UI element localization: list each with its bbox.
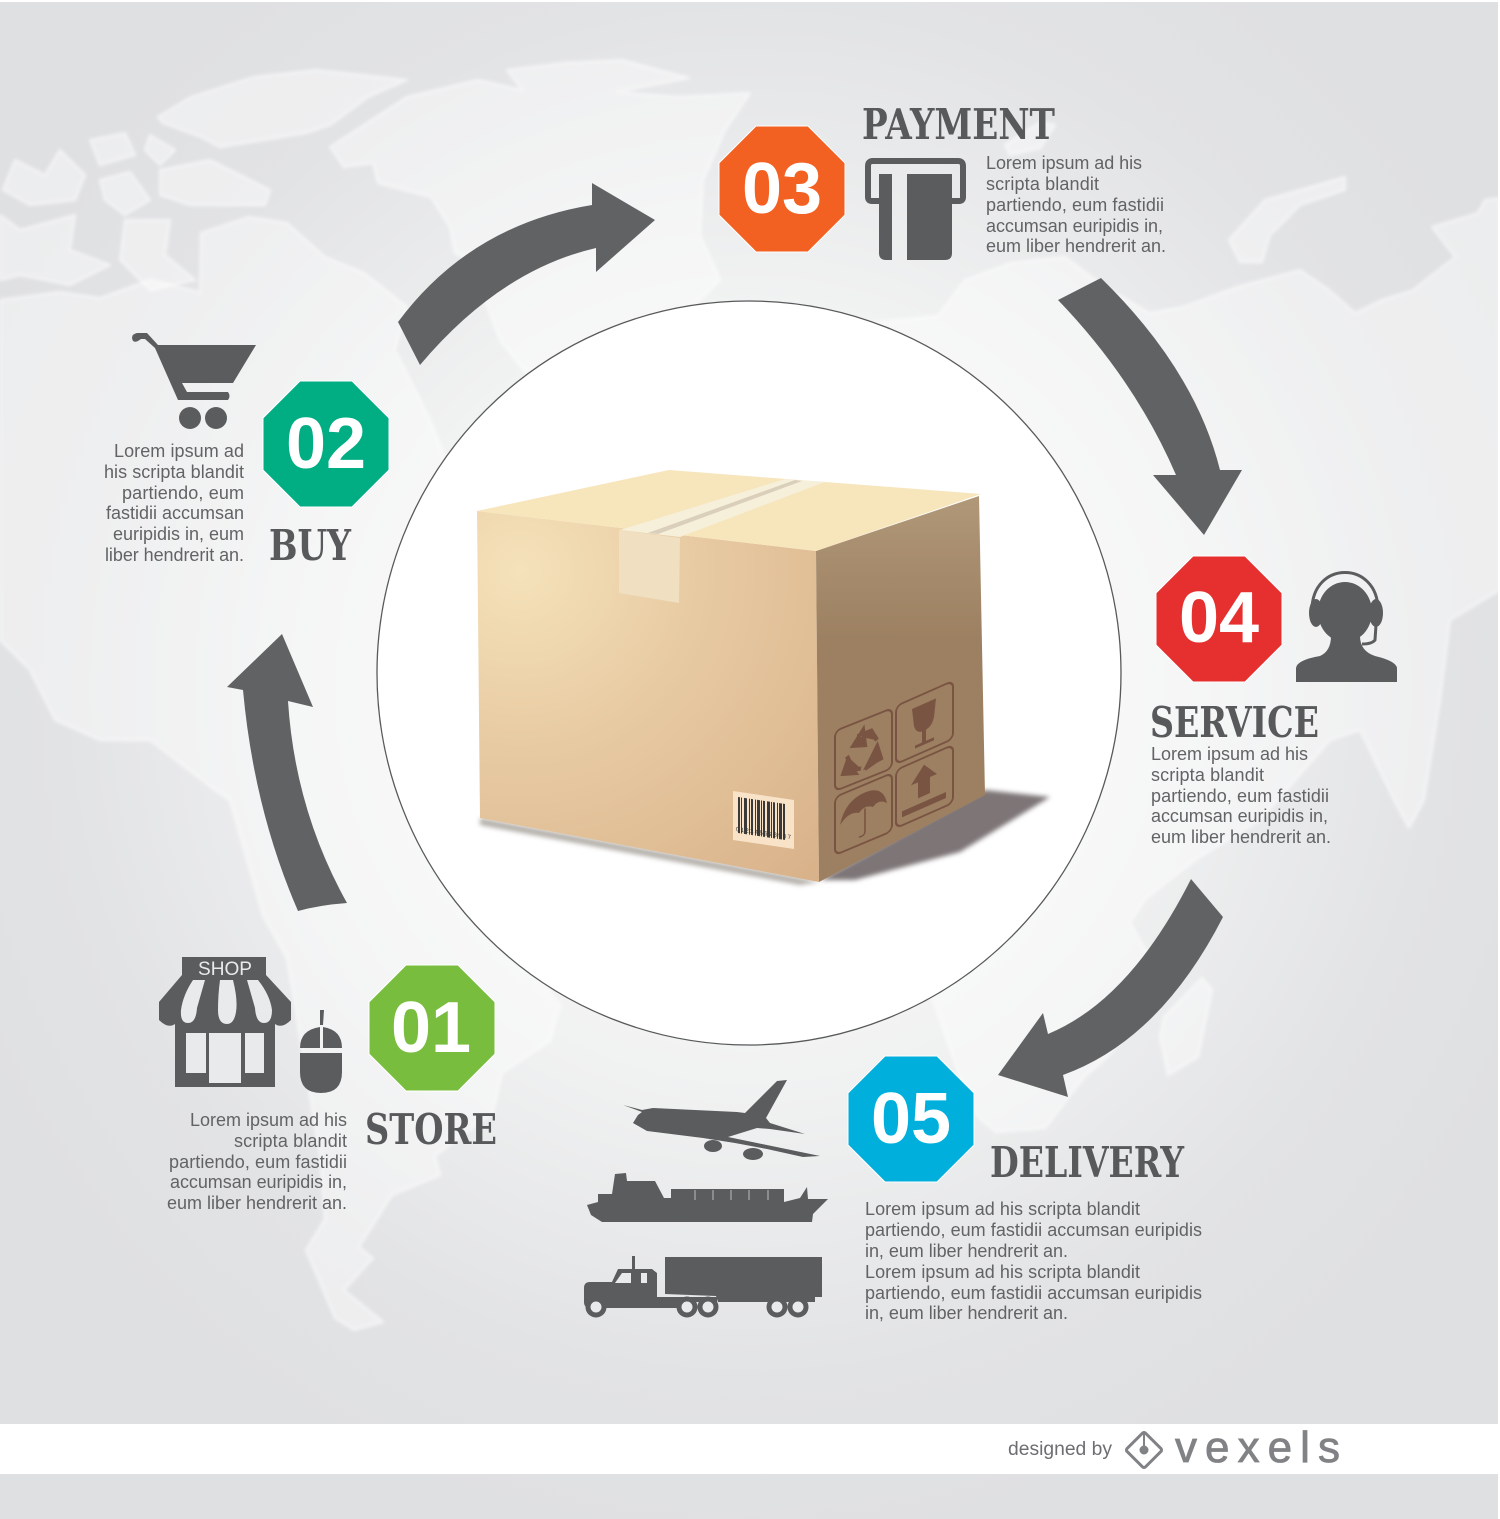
barcode label: [733, 791, 794, 849]
text: payment description: [986, 153, 1166, 256]
badge 05: [848, 1056, 974, 1182]
badge 03: 03: [742, 149, 822, 229]
text: delivery description: partiendo, eum fastidii accumsan euripidis: [865, 1220, 1202, 1240]
step 05 delivery: [584, 1056, 1202, 1323]
badge 01: 01: [391, 988, 471, 1068]
text: service description: partiendo, eum fastidii: [1151, 786, 1329, 806]
heading: delivery: DELIVERY: [990, 1138, 1185, 1187]
badge 04: 04: [1179, 578, 1259, 658]
text: payment description: scripta blandit: [986, 174, 1099, 194]
step 01 store: [159, 957, 497, 1213]
icon: shopping cart: [132, 333, 256, 429]
icon: truck: [584, 1256, 822, 1315]
text: buy description: partiendo, eum: [122, 483, 244, 503]
icon: container ship: [587, 1173, 828, 1222]
badge 01: [369, 965, 495, 1091]
text: buy description: his scripta blandit: [104, 462, 244, 482]
badge 04: [1156, 556, 1282, 682]
text: payment description: partiendo, eum fastidii: [986, 195, 1164, 215]
step 02 buy: [104, 333, 389, 570]
text: store description: [167, 1110, 347, 1213]
text: store description: Lorem ipsum ad his: [190, 1110, 347, 1130]
icon: computer mouse: [300, 1010, 342, 1093]
packing tape: [620, 479, 825, 537]
central white circle: [377, 301, 1121, 1045]
footer band: [0, 1423, 1500, 1474]
box side face: [816, 496, 985, 882]
heading: service: SERVICE: [1150, 698, 1319, 747]
arrow: store to buy: [227, 634, 347, 911]
icon: shop: SHOP: [198, 959, 252, 980]
text: payment description: accumsan euripidis in,: [986, 216, 1163, 236]
text: delivery description: Lorem ipsum ad his scripta blandit: [865, 1262, 1140, 1282]
text: store description: scripta blandit: [234, 1131, 347, 1151]
heading: store: STORE: [365, 1105, 497, 1154]
text: buy description: euripidis in, eum: [113, 524, 244, 544]
text: service description: accumsan euripidis in,: [1151, 806, 1328, 826]
icon: shop: [159, 957, 291, 1087]
arrow: payment to service: [1058, 278, 1242, 535]
text: buy description: [104, 441, 244, 565]
step 03 payment: [719, 100, 1166, 260]
text: service description: Lorem ipsum ad his: [1151, 744, 1308, 764]
barcode label: 012345678907: [736, 827, 792, 841]
badge 02: [263, 381, 389, 507]
text: store description: accumsan euripidis in,: [170, 1172, 347, 1192]
text: buy description: fastidii accumsan: [106, 503, 244, 523]
badge 02: 02: [286, 404, 366, 484]
text: service description: scripta blandit: [1151, 765, 1264, 785]
icon: airplane: [623, 1080, 820, 1160]
text: delivery description: partiendo, eum fastidii accumsan euripidis: [865, 1283, 1202, 1303]
box shadow: [820, 790, 1050, 880]
text: payment description: eum liber hendrerit an.: [986, 236, 1166, 256]
text: delivery description: in, eum liber hendrerit an.: [865, 1241, 1068, 1261]
step 04 service: [1150, 556, 1397, 847]
text: service description: [1151, 744, 1331, 847]
handling symbols: [835, 681, 953, 855]
text: delivery description: [865, 1199, 1202, 1323]
box front face: [477, 511, 819, 882]
symbol: fragile glass: [896, 681, 953, 764]
symbol: umbrella: [835, 773, 892, 855]
text: service description: eum liber hendrerit an.: [1151, 827, 1331, 847]
logo mark: [1126, 1432, 1162, 1468]
text: delivery description: Lorem ipsum ad his scripta blandit: [865, 1199, 1140, 1219]
heading: payment: PAYMENT: [862, 100, 1055, 149]
text: buy description: liber hendrerit an.: [105, 545, 244, 565]
symbol: recycle: [835, 708, 892, 791]
badge 03: [719, 126, 845, 252]
credit text: designed by: [1008, 1439, 1113, 1460]
icon: card reader: [868, 161, 963, 260]
text: store description: partiendo, eum fastidii: [169, 1152, 347, 1172]
symbol: this way up: [896, 745, 953, 828]
arrow: service to delivery: [998, 879, 1223, 1097]
arrow: buy to payment: [398, 183, 655, 365]
logo wordmark: vexels: [1175, 1423, 1340, 1472]
badge 05: 05: [871, 1079, 951, 1159]
text: payment description: Lorem ipsum ad his: [986, 153, 1142, 173]
icon: support agent with headset: [1296, 572, 1397, 682]
box top face: [477, 470, 981, 551]
text: store description: eum liber hendrerit an.: [167, 1193, 347, 1213]
text: buy description: Lorem ipsum ad: [114, 441, 244, 461]
heading: buy: BUY: [269, 521, 352, 570]
cardboard box: [477, 470, 1050, 885]
text: delivery description: in, eum liber hendrerit an.: [865, 1303, 1068, 1323]
